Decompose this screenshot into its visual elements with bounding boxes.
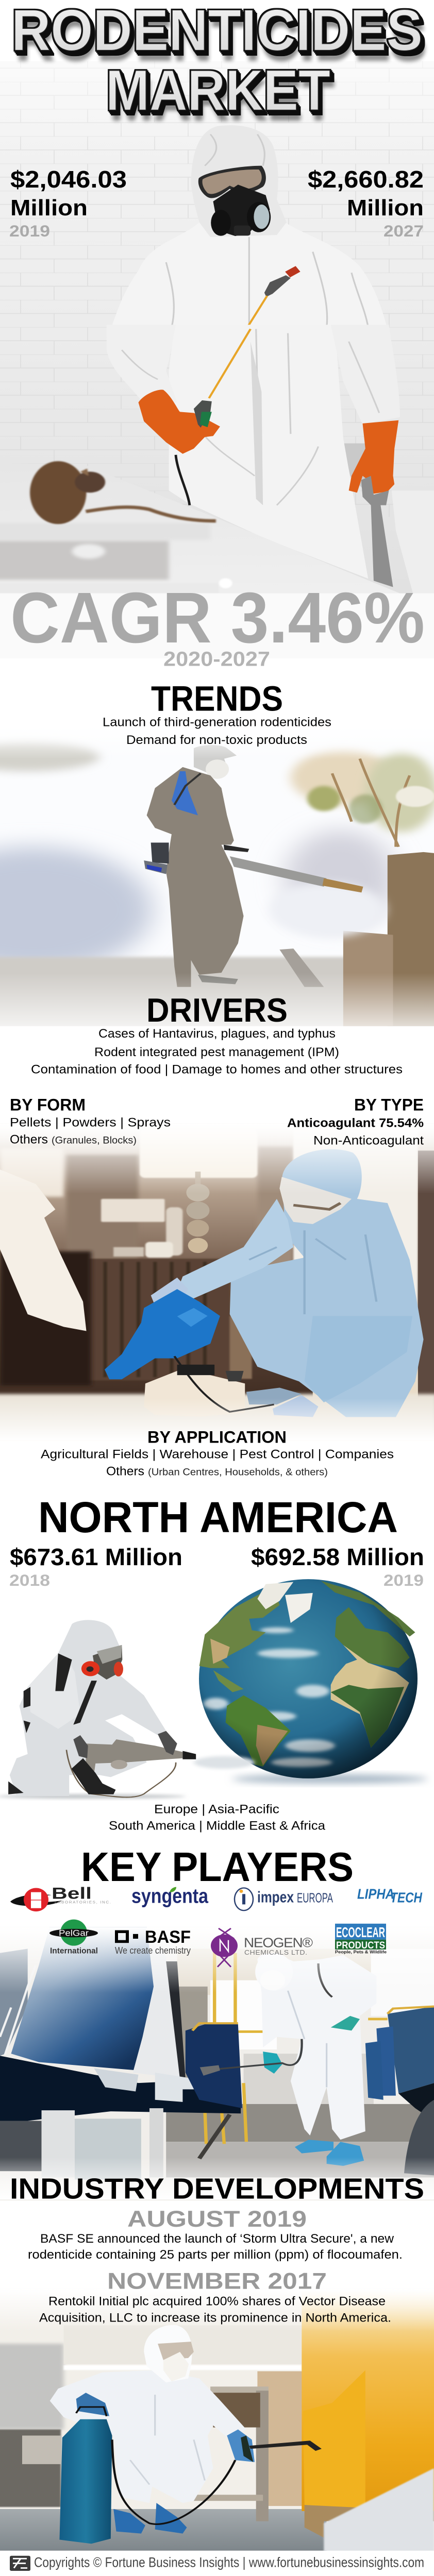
section: by type <box>287 1096 424 1147</box>
stat: 2027 market size: Million <box>347 195 424 220</box>
trees at right <box>291 750 434 847</box>
worker in white suit <box>200 1953 376 2166</box>
text: drivers list: Rodent integrated pest management (IPM) <box>94 1045 339 1059</box>
illustration: worker lower body, gloves and rat on counter <box>0 325 434 658</box>
panel: bus disinfection photo <box>0 1926 434 2200</box>
development: August 2019 <box>28 2206 403 2262</box>
stat: North America 2019: 2019 <box>383 1571 424 1589</box>
section: by form: BY FORM <box>10 1096 86 1114</box>
worker in blue suit <box>151 1149 424 1417</box>
stat: North America 2019: $692.58 Million <box>251 1544 424 1570</box>
section: by application: Agricultural Fields | Warehouse | Pest Control | Companies <box>41 1448 394 1461</box>
stat: CAGR: 2020-2027 <box>163 647 270 670</box>
logo: Neogen Chemicals: CHEMICALS LTD. <box>244 1949 307 1956</box>
bus interior <box>166 1946 434 2177</box>
development: November 2017: Rentokil Initial plc acquired 100% shares of Vector Disease <box>48 2295 386 2308</box>
icon: wand pole and hose <box>176 329 251 505</box>
text: drivers list <box>31 1027 403 1076</box>
bedside items <box>89 1199 252 1380</box>
panel: warehouse spraying photo <box>0 2289 434 2552</box>
development: November 2017 <box>39 2268 391 2325</box>
text: other regions <box>109 1802 325 1833</box>
logo: BASF: BASF <box>145 1927 191 1947</box>
suit torso and arms <box>107 325 400 579</box>
ground and walls <box>0 852 434 1032</box>
section: by type: BY TYPE <box>354 1096 424 1114</box>
seat legs <box>0 2108 230 2179</box>
icon: left orange glove <box>138 389 220 454</box>
section: by type: Anticoagulant 75.54% <box>287 1116 424 1130</box>
pillow <box>0 1170 87 1331</box>
section: by application: Others <box>106 1465 144 1478</box>
logo: Bell Laboratories: Bell <box>52 1885 92 1902</box>
text: trends list: Demand for non-toxic products <box>126 733 307 747</box>
icon: goggles <box>198 166 266 198</box>
seats <box>0 1926 434 2175</box>
logo: Ecoclear Products <box>335 1924 387 1954</box>
logo: Bell Laboratories: LABORATORIES, INC. <box>55 1900 111 1904</box>
heading: North America: NORTH AMERICA <box>38 1493 398 1541</box>
harness straps <box>24 1653 97 1733</box>
logo: PelGar International: PelGar <box>59 1928 89 1938</box>
logo: Liphatech: LIPHA <box>357 1887 394 1902</box>
logo: Liphatech: TECH <box>390 1890 423 1906</box>
stat: North America 2018 <box>9 1544 182 1589</box>
development: August 2019: AUGUST 2019 <box>127 2206 307 2232</box>
text: trends list: Launch of third-generation rodenticides <box>103 715 331 729</box>
stat: 2019 market size <box>9 166 127 240</box>
logo: Liphatech <box>357 1887 423 1906</box>
yellow containers <box>302 2291 434 2552</box>
stat: North America 2019 <box>251 1544 424 1589</box>
icon: fog gun <box>66 1739 196 1797</box>
heading: Key Players: KEY PLAYERS <box>81 1844 354 1890</box>
logo: Impex Europa <box>235 1888 333 1910</box>
stat: 2027 market size: $2,660.82 <box>308 166 424 193</box>
icon: blue pressure tank <box>59 2407 235 2544</box>
panel: bedroom disinfection photo <box>0 1121 434 1444</box>
gloves and boots <box>8 1731 177 1794</box>
logo: PelGar International <box>49 1920 98 1955</box>
logo: Neogen Chemicals <box>211 1928 313 1967</box>
logo: PelGar International: International <box>50 1946 98 1955</box>
title: Rodenticides Market <box>11 0 423 122</box>
worker in white suit <box>50 2325 322 2534</box>
room wall panels <box>0 1130 434 1440</box>
section: by form <box>10 1096 171 1146</box>
icon: rat <box>30 461 216 524</box>
heading: Industry Developments: INDUSTRY DEVELOPMENTS <box>10 2172 424 2205</box>
section: by application: BY APPLICATION <box>147 1428 287 1447</box>
text: other regions: Europe | Asia-Pacific <box>154 1802 279 1816</box>
lamp <box>140 1130 257 1253</box>
section: by form: Others <box>10 1133 48 1146</box>
stat: 2019 market size: Million <box>10 195 88 220</box>
logo: Impex Europa: impex <box>257 1888 294 1906</box>
logo: BASF: We create chemistry <box>115 1946 191 1956</box>
icon: respirator <box>211 184 271 236</box>
development: August 2019: BASF SE announced the launch of ‘Storm Ultra Secure', a new <box>40 2232 394 2246</box>
text: drivers list: Contamination of food | Damage to homes and other structures <box>31 1063 403 1076</box>
logo: BASF <box>115 1927 191 1956</box>
icon: spray wand head <box>246 266 301 329</box>
illustration: kneeling worker with fog gun <box>0 1620 255 1799</box>
text: drivers list: Cases of Hantavirus, plagues, and typhus <box>98 1027 336 1041</box>
logo: Bell Laboratories <box>10 1885 111 1911</box>
panel: trends fogging photo <box>0 721 434 1032</box>
logo: Ecoclear Products: ECOCLEAR <box>336 1925 385 1941</box>
shelf at right <box>392 490 434 602</box>
icon: Fortune Business Insights logo <box>10 2556 30 2571</box>
title: Rodenticides Market: MARKET <box>106 58 330 122</box>
icon: right orange glove <box>349 420 398 494</box>
stat: 2019 market size: $2,046.03 <box>10 166 127 193</box>
section: by type: Non-Anticoagulant <box>313 1133 424 1147</box>
logo: Impex Europa: EUROPA <box>297 1891 333 1905</box>
kitchen counter <box>0 463 434 658</box>
development: November 2017: NOVEMBER 2017 <box>107 2268 327 2294</box>
logo: Neogen Chemicals: NEOGEN® <box>244 1936 313 1950</box>
floor <box>0 1394 434 1444</box>
stat: 2027 market size: 2027 <box>383 222 424 240</box>
illustration: globe <box>199 1579 428 1783</box>
logo: Ecoclear Products: People, Pets & Wildlife <box>335 1950 387 1954</box>
logo: Ecoclear Products: PRODUCTS <box>336 1940 385 1951</box>
stat: North America 2018: 2018 <box>9 1571 50 1589</box>
section: by application: (Urban Centres, Households, & others) <box>148 1467 328 1478</box>
icon: grey tool handle <box>361 476 393 587</box>
panel: hero background wall <box>0 0 434 658</box>
icon: spray handle <box>194 400 212 428</box>
continents <box>199 1586 279 1668</box>
worker with fogger <box>144 745 363 987</box>
heading: Drivers: DRIVERS <box>146 992 288 1029</box>
text: other regions: South America | Middle East & Africa <box>109 1819 325 1833</box>
heading: Trends: TRENDS <box>151 679 283 719</box>
stat: 2027 market size <box>308 166 424 240</box>
section: by form: Pellets | Powders | Sprays <box>10 1116 171 1129</box>
stat: 2019 market size: 2019 <box>9 222 50 240</box>
development: August 2019: rodenticide containing 25 parts per million (ppm) of flocoumafen. <box>28 2248 403 2262</box>
text: trends list <box>103 715 331 747</box>
icon: blue fogger sprayer <box>105 1289 274 1417</box>
respirator helmet <box>81 1645 123 1680</box>
stat: North America 2018: $673.61 Million <box>10 1544 182 1570</box>
warehouse background <box>0 2325 327 2552</box>
section: by application <box>41 1428 394 1478</box>
section: by form: (Granules, Blocks) <box>52 1135 137 1146</box>
clouds <box>204 1628 335 1767</box>
logo: Syngenta: syngenta <box>131 1884 208 1907</box>
development: November 2017: Acquisition, LLC to increase its prominence in North America. <box>39 2311 391 2325</box>
illustration: worker in protective suit <box>111 125 388 329</box>
